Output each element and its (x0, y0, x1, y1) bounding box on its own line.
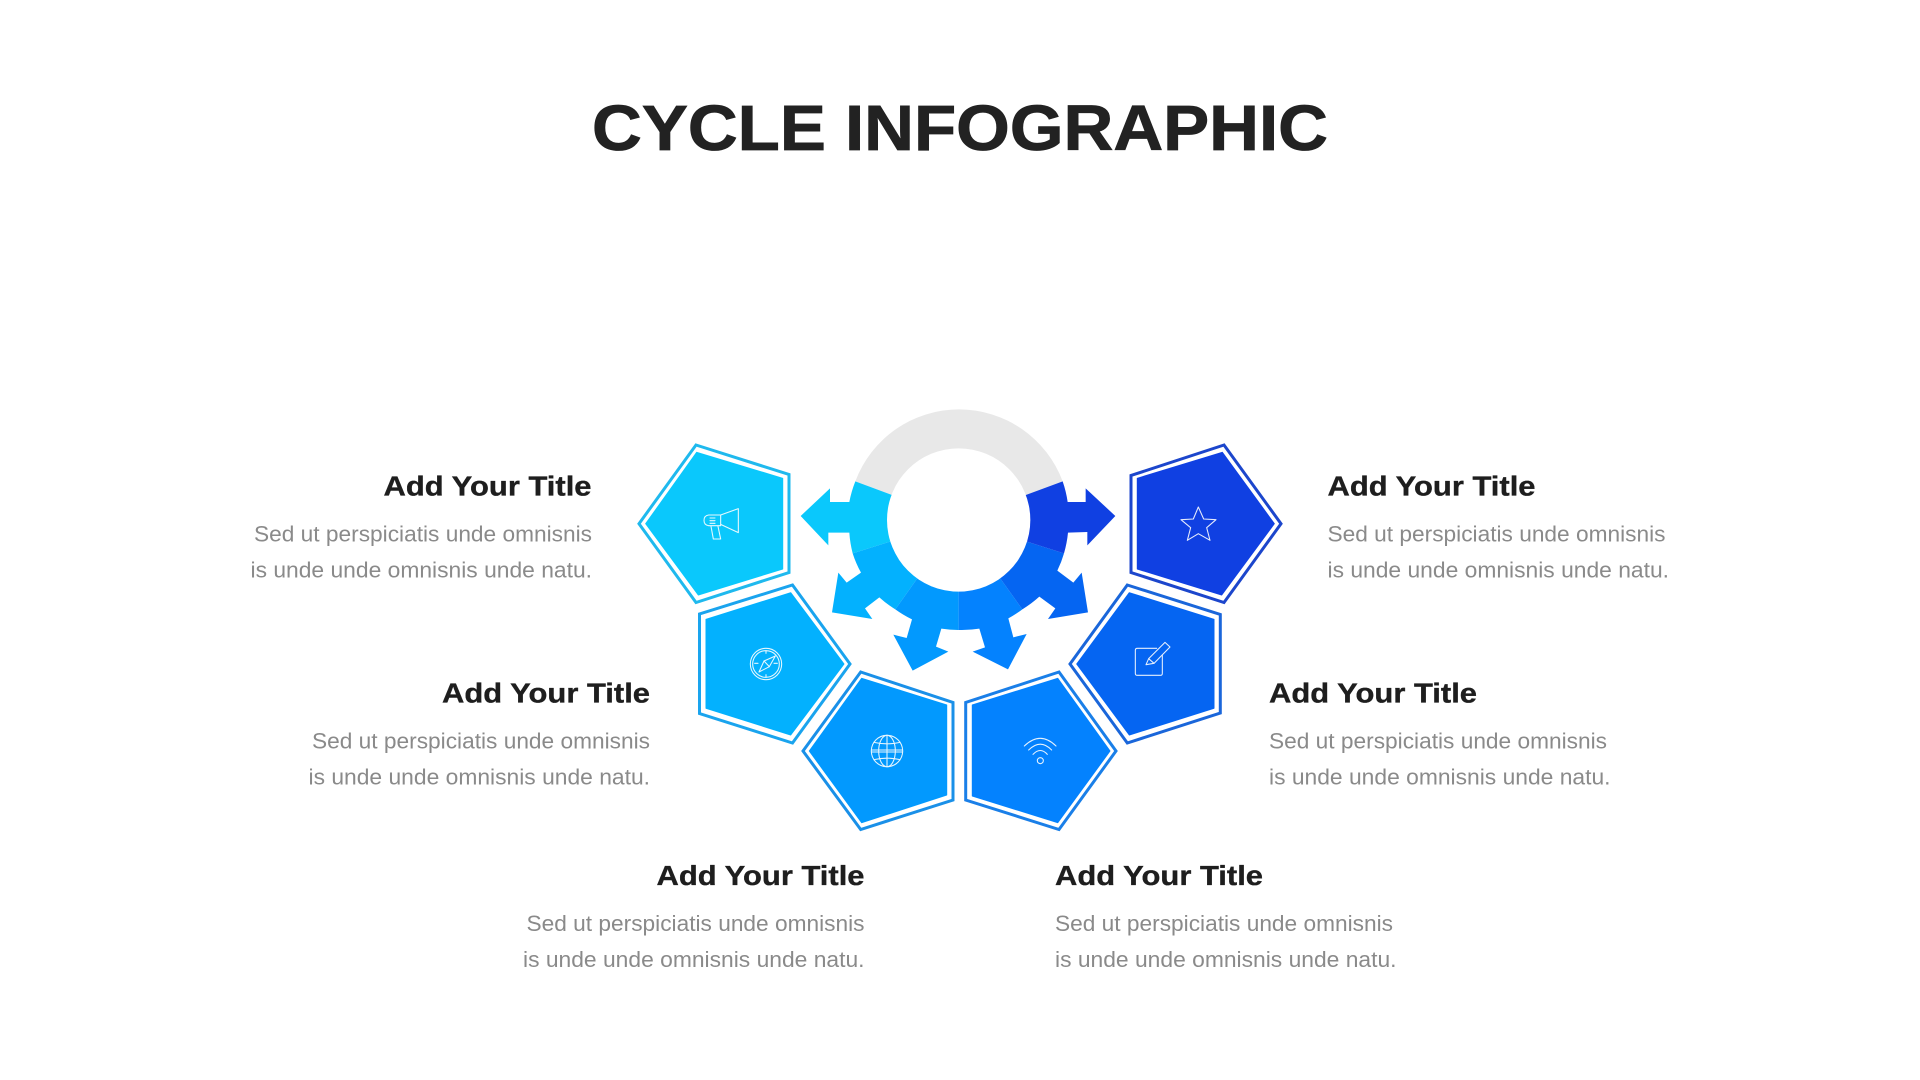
text block: upper right: is unde unde omnisnis unde natu. (1328, 557, 1669, 582)
pentagon 4: wifi (966, 672, 1116, 830)
icon: wifi (1024, 738, 1056, 764)
text block: bottom left (523, 860, 864, 972)
text block: upper right: Sed ut perspiciatis unde omnisnis (1328, 522, 1666, 547)
text block: bottom left: Add Your Title (656, 860, 864, 891)
text block: upper left: Sed ut perspiciatis unde omnisnis (254, 522, 592, 547)
pentagon 5: edit note (1070, 585, 1220, 743)
text block: middle left: Add Your Title (442, 678, 650, 709)
icon: globe (871, 735, 903, 767)
pentagon 3: globe (803, 672, 953, 830)
icon: star (1181, 507, 1216, 540)
arrow 4: bottom right (959, 520, 1027, 669)
text block: upper left: Add Your Title (384, 471, 592, 502)
text block: bottom left: is unde unde omnisnis unde natu. (523, 947, 864, 972)
text block: bottom left: Sed ut perspiciatis unde omnisnis (526, 911, 864, 936)
pentagon 1: megaphone (639, 445, 789, 602)
arrow 1: left (801, 481, 959, 553)
arrow 3: bottom left (893, 520, 959, 671)
text block: middle right: Sed ut perspiciatis unde omnisnis (1269, 729, 1607, 754)
text block: bottom right (1055, 860, 1396, 972)
text block: middle left: Sed ut perspiciatis unde omnisnis (312, 729, 650, 754)
icon: compass (750, 648, 782, 680)
arrow 2: lower left (832, 520, 959, 619)
pentagon 2: compass (700, 585, 850, 743)
icon: megaphone (704, 509, 738, 539)
text block: middle left (308, 678, 650, 789)
text block: middle right: is unde unde omnisnis unde natu. (1269, 764, 1610, 789)
text block: upper right: Add Your Title (1328, 471, 1536, 502)
text block: bottom right: Sed ut perspiciatis unde omnisnis (1055, 911, 1393, 936)
central cycle: ring with six arrows (801, 409, 1115, 671)
title: CYCLE INFOGRAPHIC (592, 92, 1328, 164)
text block: upper left: is unde unde omnisnis unde natu. (250, 557, 592, 582)
text block: middle left: is unde unde omnisnis unde natu. (308, 764, 650, 789)
text block: upper left (250, 471, 592, 582)
arrow 6: right (959, 481, 1115, 553)
text block: upper right (1328, 471, 1669, 582)
text block: middle right (1269, 678, 1610, 789)
grey ring arc (855, 409, 1063, 520)
text block: bottom right: is unde unde omnisnis unde natu. (1055, 947, 1396, 972)
text block: middle right: Add Your Title (1269, 678, 1477, 709)
icon: edit note (1135, 642, 1170, 675)
text block: bottom right: Add Your Title (1055, 860, 1263, 891)
pentagon 6: star (1131, 445, 1281, 602)
arrow 5: lower right (959, 520, 1088, 619)
centre white circle (887, 448, 1030, 592)
